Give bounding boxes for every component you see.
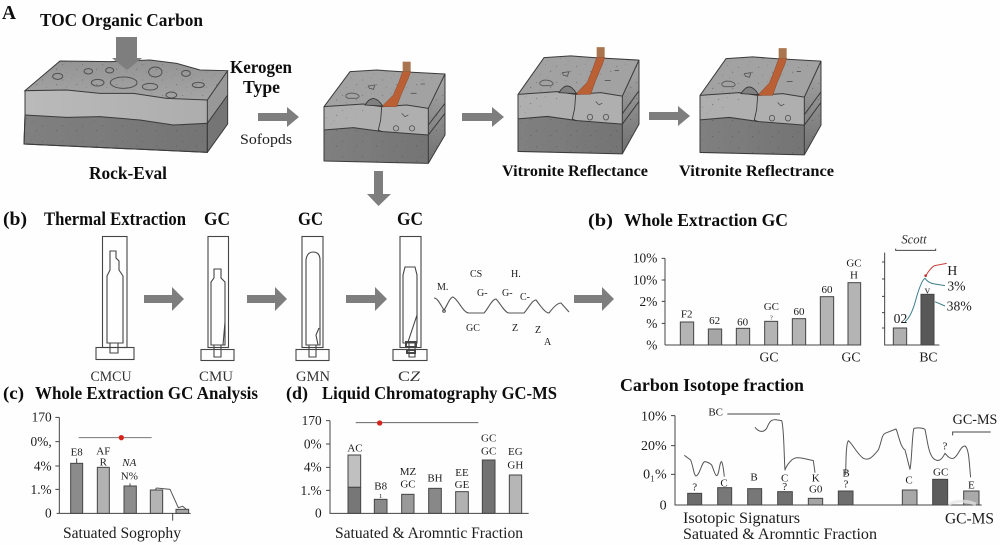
arrow: block 1 to block 2 xyxy=(258,107,299,127)
chart: panel c bars: 0%, xyxy=(31,434,52,449)
captions under vials xyxy=(90,369,421,385)
chart: whole extraction bars: % xyxy=(646,316,657,331)
illustration: rock block with vein 3 xyxy=(518,47,639,154)
panel letter (d): (d) xyxy=(286,383,308,404)
chart: panel c bars: E8 xyxy=(71,447,83,459)
chart: panel d bars: 1 xyxy=(379,493,382,500)
arrow: down from block 2 xyxy=(367,171,391,206)
label: Sofopds: Sofopds xyxy=(240,132,292,148)
chart: molecular chain trace: Z xyxy=(535,325,541,336)
chart: panel d bars: MZ xyxy=(400,466,417,478)
chart: carbon isotope bars and traces: ? xyxy=(782,481,787,493)
chart: molecular chain trace: Z xyxy=(512,323,518,334)
chart: panel d bars: EG xyxy=(508,446,523,458)
panel letter (b) left: (b) xyxy=(3,209,27,230)
chart: molecular chain trace xyxy=(434,269,569,348)
chart: whole extraction bars: 60 xyxy=(794,306,805,318)
chart: carbon isotope bars and traces: GC xyxy=(933,466,948,478)
chart: panel d bars: GC xyxy=(481,432,496,444)
chart: carbon isotope bars and traces: ? xyxy=(943,440,948,452)
caption: Satuated and Aromntic Fraction: Satuated & Aromntic Fraction xyxy=(683,526,877,543)
chart: carbon isotope bars and traces: GC-MS xyxy=(953,412,997,428)
heading: GC 3: GC xyxy=(397,209,423,230)
label: Vitronite Reflectrance: Vitronite Reflectrance xyxy=(679,163,834,180)
chart: Scott bars with curves: BC xyxy=(919,350,938,365)
chart: molecular chain trace: G- xyxy=(502,288,513,299)
heading: GC 2: GC xyxy=(298,209,323,230)
chart: molecular chain trace: M. xyxy=(437,282,448,293)
icon: extraction vial CMCU xyxy=(96,236,134,360)
panel letter A: A xyxy=(2,2,17,24)
icon: extraction vial with residue xyxy=(393,236,427,360)
illustration: large rock block xyxy=(24,60,228,152)
chart: carbon isotope bars and traces: C xyxy=(720,477,728,489)
chart: molecular chain trace: G- xyxy=(477,288,488,299)
chart: panel d bars: 1.% xyxy=(301,483,322,498)
chart: carbon isotope bars and traces: 0₁% xyxy=(643,468,667,483)
chart: whole extraction bars: GC xyxy=(846,257,862,269)
label: Kerogen Type: Type xyxy=(243,77,280,97)
chart: whole extraction bars: % xyxy=(646,337,657,352)
heading: TOC Organic Carbon: TOC Organic Carbon xyxy=(40,10,203,30)
heading: Liquid Chromatography GC-MS: Liquid Chromatography GC-MS xyxy=(322,383,557,403)
arrow: vial 1 to vial 2 xyxy=(144,287,184,311)
chart: carbon isotope bars and traces: K xyxy=(812,473,820,485)
chart: carbon isotope bars and traces xyxy=(641,407,997,527)
captions under vials: CZ xyxy=(398,369,421,385)
chart: carbon isotope bars and traces: G0 xyxy=(809,484,823,496)
arrow: chain to chart xyxy=(574,287,614,311)
label: Kerogen Type: Kerogen xyxy=(230,57,292,77)
chart: Scott bars with curves: 3% xyxy=(947,279,966,294)
arrow: block 2 to block 3 xyxy=(462,107,504,127)
chart: whole extraction bars xyxy=(633,251,862,365)
chart: carbon isotope bars and traces: GC-MS xyxy=(945,510,994,527)
chart: whole extraction bars: GC xyxy=(842,350,860,365)
captions under vials: CMU xyxy=(199,369,233,385)
captions under vials: GMN xyxy=(296,369,330,385)
chart: whole extraction bars: 10% xyxy=(633,251,657,266)
illustration: rock block with vein 2 xyxy=(324,62,445,163)
chart: panel d bars: B8 xyxy=(374,480,388,492)
chart: whole extraction bars: 2% xyxy=(640,294,657,309)
heading: Whole Extraction GC: Whole Extraction GC xyxy=(624,210,788,230)
chart: panel c bars: 170 xyxy=(32,410,52,425)
chart: panel d bars xyxy=(301,413,529,521)
arrow: down into large block xyxy=(112,37,142,70)
chart: panel d bars: 170 xyxy=(302,413,322,428)
chart: Scott bars with curves: Scott xyxy=(901,232,927,246)
chart: whole extraction bars: 60 xyxy=(737,317,749,329)
arrow: vial 3 to vial 4 xyxy=(346,287,387,311)
chart: panel d bars: AC xyxy=(347,443,363,455)
chart: panel c bars: 4% xyxy=(34,458,52,473)
chart: Scott bars with curves: H xyxy=(947,263,957,278)
chart: panel c bars xyxy=(31,410,191,521)
arrow: block 3 to block 4 xyxy=(649,106,690,126)
chart: whole extraction bars: ? xyxy=(770,314,773,321)
chart: carbon isotope bars and traces: ? xyxy=(844,478,849,490)
chart: molecular chain trace: A xyxy=(544,337,552,348)
chart: panel c bars: 0 xyxy=(45,506,52,521)
chart: panel d bars: GH xyxy=(507,459,523,471)
chart: panel d bars: GE xyxy=(455,479,470,491)
icon: extraction vial CMU xyxy=(201,236,234,360)
label: Vitronite Reflectance: Vitronite Reflectance xyxy=(502,163,648,180)
chart: carbon isotope bars and traces: 10% xyxy=(641,410,667,425)
caption: Satuated and Aromntic Fraction: Satuated & Aromntic Fraction xyxy=(335,525,523,542)
chart: panel c bars: NA xyxy=(121,457,137,469)
heading: GC 1: GC xyxy=(204,209,230,230)
chart: Scott bars with curves: 38% xyxy=(947,298,972,313)
chart: carbon isotope bars and traces: E xyxy=(968,480,975,492)
chart: molecular chain trace: CS xyxy=(470,269,482,280)
chart: panel d bars: GC xyxy=(400,478,416,490)
chart: panel d bars: 4% xyxy=(304,460,322,475)
chart: carbon isotope bars and traces: BC xyxy=(708,407,723,419)
chart: whole extraction bars: GC xyxy=(760,350,778,365)
chart: Scott bars with curves: 02 xyxy=(894,311,907,326)
chart: whole extraction bars: H xyxy=(850,269,858,281)
panel letter (c): (c) xyxy=(3,383,24,404)
chart: Scott bars with curves: v xyxy=(925,284,931,296)
chart: molecular chain trace: GC xyxy=(466,323,480,334)
chart: panel d bars: 0 xyxy=(315,506,322,521)
chart: panel d bars: EE xyxy=(455,467,469,479)
chart: panel d bars: BH xyxy=(427,472,443,484)
chart: panel d bars: 0% xyxy=(304,436,322,451)
caption: Isotopic Signaturs: Isotopic Signaturs xyxy=(683,510,800,527)
chart: carbon isotope bars and traces: C xyxy=(781,473,788,485)
chart: whole extraction bars: 10% xyxy=(633,273,657,288)
icon: extraction vial GMN xyxy=(296,236,329,360)
chart: panel c bars: N% xyxy=(121,471,138,483)
chart: carbon isotope bars and traces: C xyxy=(905,474,913,486)
heading: Carbon Isotope fraction: Carbon Isotope fraction xyxy=(620,375,804,395)
chart: carbon isotope bars and traces: B xyxy=(842,468,850,480)
chart: whole extraction bars: 60 xyxy=(822,284,833,296)
arrow: vial 2 to vial 3 xyxy=(247,287,287,311)
chart: carbon isotope bars and traces: B xyxy=(750,472,758,484)
chart: whole extraction bars: GC xyxy=(764,301,779,313)
chart: panel c bars: AF xyxy=(96,445,110,457)
chart: molecular chain trace: H. xyxy=(511,269,521,280)
chart: carbon isotope bars and traces: 0 xyxy=(660,498,667,513)
chart: panel c bars: 1.% xyxy=(31,482,52,497)
label: Rock-Eval: Rock-Eval xyxy=(89,163,167,183)
heading: Whole Extraction GC Analysis: Whole Extraction GC Analysis xyxy=(35,383,258,403)
chart: molecular chain trace: C- xyxy=(520,292,530,303)
chart: Scott bars with curves xyxy=(882,232,972,365)
illustration: rock block with vein 4 xyxy=(700,48,821,155)
chart: carbon isotope bars and traces: 20% xyxy=(641,439,667,454)
panel letter (b) right: (b) xyxy=(588,210,613,231)
chart: panel c bars: R xyxy=(100,457,108,469)
chart: whole extraction bars: F2 xyxy=(681,308,692,320)
heading: Thermal Extraction: Thermal Extraction xyxy=(44,209,186,230)
captions under vials: CMCU xyxy=(90,369,132,385)
chart: whole extraction bars: 62 xyxy=(709,315,720,327)
chart: carbon isotope bars and traces: ? xyxy=(692,482,697,494)
caption: Satuated Sogrophy: Satuated Sogrophy xyxy=(63,525,181,542)
label: Kerogen Type xyxy=(230,57,292,97)
chart: panel d bars: GC xyxy=(481,445,496,457)
